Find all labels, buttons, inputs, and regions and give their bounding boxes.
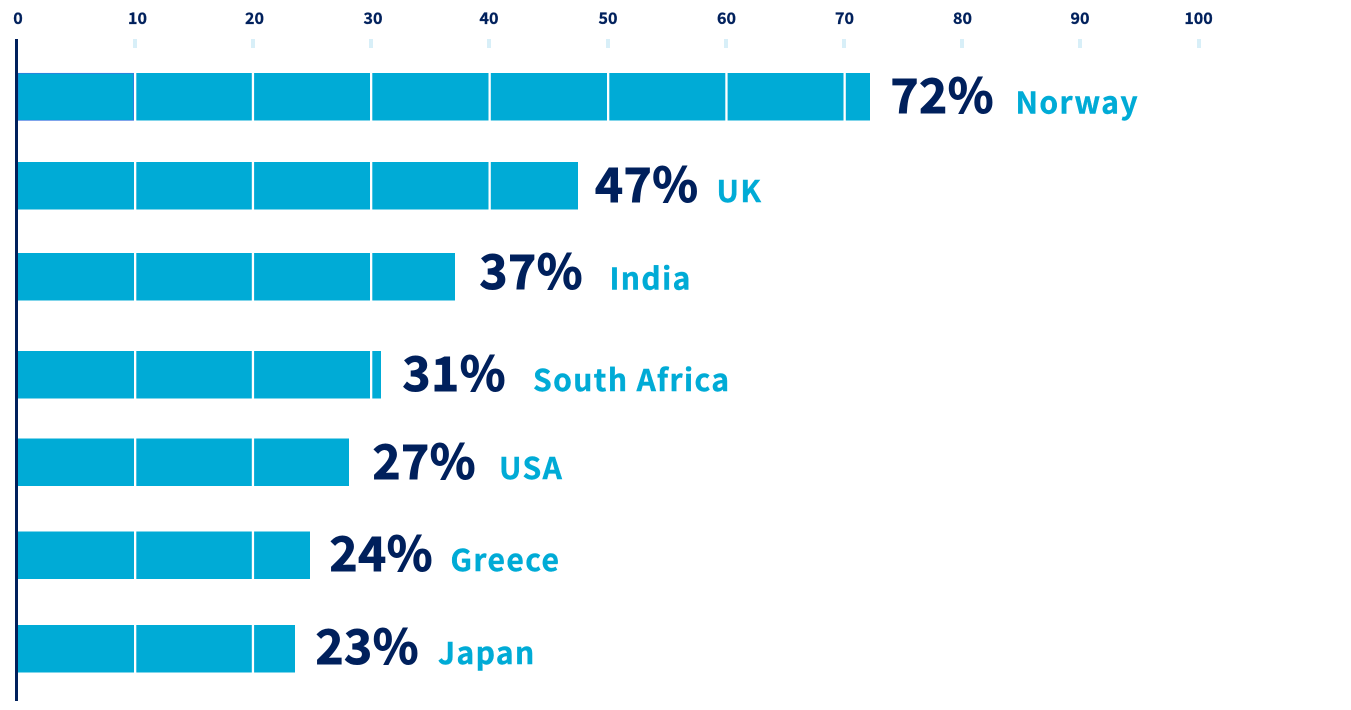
value and label: UK: 47% <box>595 147 699 216</box>
value and label: Greece: Greece <box>450 536 560 580</box>
bar: South Africa 31% <box>17 351 381 399</box>
value and label: Greece <box>330 516 560 585</box>
vertical axis line <box>15 39 18 701</box>
value and label: Japan <box>316 609 536 678</box>
bar: India 37% <box>17 253 455 301</box>
bar: Japan 23% <box>17 625 295 673</box>
axis labels: 80 <box>953 5 972 29</box>
value and label: UK <box>595 147 762 216</box>
value and label: Japan: Japan <box>438 629 536 673</box>
axis labels: 10 <box>128 5 147 29</box>
value and label: India: India <box>610 254 692 298</box>
axis labels: 0 <box>13 5 23 29</box>
axis labels <box>13 5 1213 29</box>
value and label: USA: 27% <box>372 424 476 493</box>
value and label: UK: UK <box>716 167 762 211</box>
bar: Greece 24% <box>17 531 310 579</box>
value and label: USA <box>372 424 563 493</box>
value and label: India <box>480 234 692 303</box>
axis labels: 90 <box>1071 5 1089 29</box>
axis tick marks <box>133 39 1201 48</box>
value and label: Norway: Norway <box>1016 78 1139 122</box>
value and label: South Africa: South Africa <box>533 356 730 400</box>
bar: USA 27% <box>17 438 349 486</box>
value and label: Norway <box>890 58 1139 127</box>
value and label: Norway: 72% <box>890 58 994 127</box>
value and label: South Africa <box>402 336 730 405</box>
axis labels: 40 <box>480 5 498 29</box>
value and label: South Africa: 31% <box>402 336 506 405</box>
bar: UK 47% <box>17 162 578 210</box>
bar: Norway 72% <box>17 73 870 121</box>
value and label: Japan: 23% <box>316 609 419 678</box>
value and label: USA: USA <box>499 444 563 488</box>
axis labels: 60 <box>717 5 736 29</box>
axis labels: 100 <box>1184 5 1213 29</box>
axis labels: 30 <box>364 5 382 29</box>
axis labels: 20 <box>245 5 264 29</box>
value and label: India: 37% <box>480 234 583 303</box>
axis labels: 50 <box>599 5 617 29</box>
value and label: Greece: 24% <box>330 516 433 585</box>
axis labels: 70 <box>835 5 854 29</box>
